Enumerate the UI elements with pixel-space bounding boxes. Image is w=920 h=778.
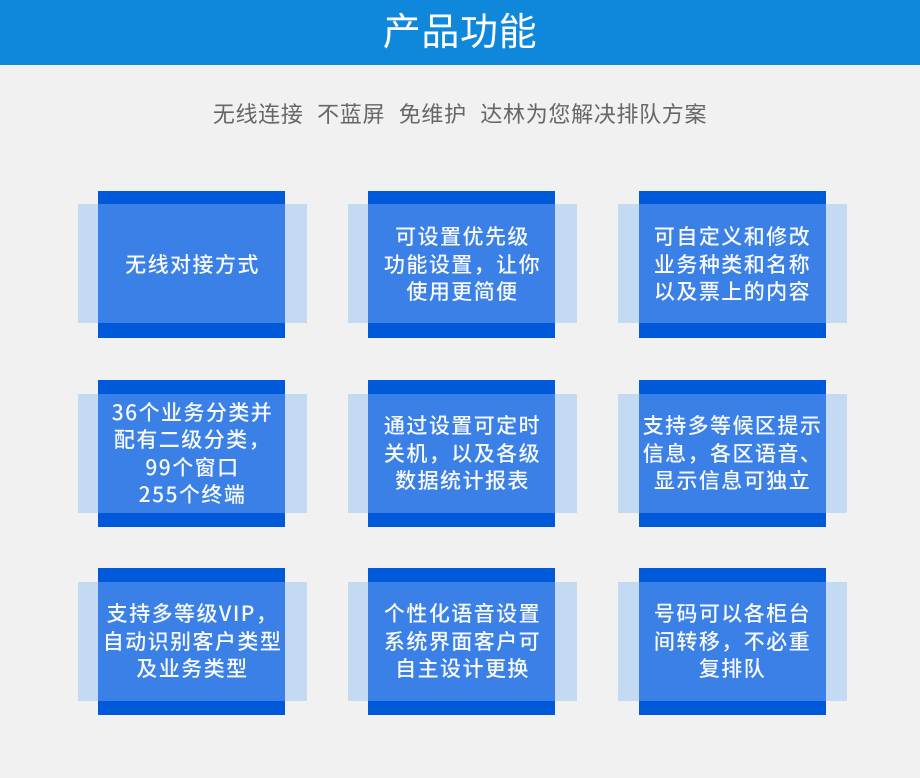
card: personalized voice and interface: 系统界面客户可 [384,626,541,656]
card: waiting zones [618,380,847,527]
card: custom ticket content: 以及票上的内容 [654,276,811,306]
subtitle: 无线连接 不蓝屏 免维护 达林为您解决排队方案 [213,102,707,127]
card: custom ticket content: 可自定义和修改 [654,221,811,251]
card: personalized voice and interface: 个性化语音设置 [384,598,541,628]
card: number transfer: 间转移，不必重 [654,626,811,656]
card: waiting zones: 显示信息可独立 [654,465,811,495]
card: number transfer: 复排队 [699,653,766,683]
card: business categories: 255个终端 [139,479,246,509]
card: scheduled shutdown and reports: 关机，以及各级 [384,438,541,468]
title banner: 产品功能 [383,12,537,54]
card: number transfer: 号码可以各柜台 [654,598,811,628]
card: custom ticket content [618,191,847,338]
card: VIP levels [78,568,307,715]
card: wireless connection [78,191,307,338]
card: number transfer [618,568,847,715]
card: priority settings: 可设置优先级 [395,221,530,251]
card: VIP levels: 支持多等级VIP， [107,598,278,628]
card: scheduled shutdown and reports: 通过设置可定时 [384,410,541,440]
card: custom ticket content: 业务种类和名称 [654,249,811,279]
card: waiting zones: 支持多等候区提示 [643,410,822,440]
card: VIP levels: 自动识别客户类型 [103,626,282,656]
card: scheduled shutdown and reports: 数据统计报表 [395,465,530,495]
card: business categories: 36个业务分类并 [112,397,273,427]
card: business categories [78,380,307,527]
card: wireless connection: 无线对接方式 [125,249,260,279]
card: personalized voice and interface: 自主设计更换 [395,653,530,683]
card: waiting zones: 信息，各区语音、 [643,438,822,468]
title banner [0,0,920,65]
card: scheduled shutdown and reports [348,380,577,527]
card: personalized voice and interface [348,568,577,715]
card: priority settings: 功能设置，让你 [384,249,541,279]
card: priority settings: 使用更简便 [406,276,519,306]
card: VIP levels: 及业务类型 [136,653,249,683]
card: business categories: 99个窗口 [145,452,240,482]
card: priority settings [348,191,577,338]
card: business categories: 配有二级分类， [114,424,271,454]
